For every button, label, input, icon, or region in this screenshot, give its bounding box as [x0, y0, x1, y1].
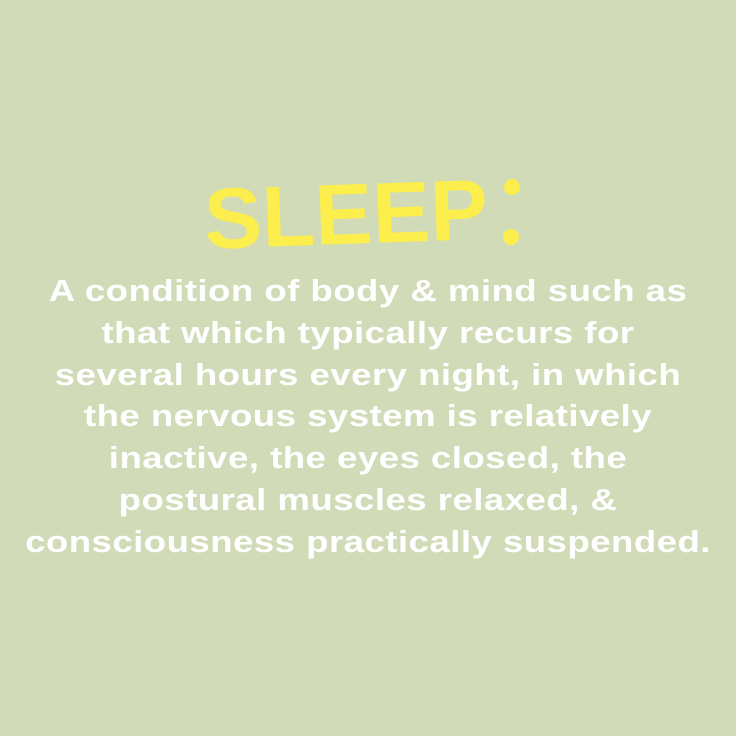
definition text: A condition of body & mind such as: [49, 273, 687, 308]
definition text: the nervous system is relatively: [84, 398, 652, 433]
definition text: several hours every night, in which: [55, 357, 681, 392]
definition text: that which typically recurs for: [102, 315, 634, 350]
definition text: [25, 273, 711, 559]
definition text: consciousness practically suspended.: [25, 524, 711, 559]
definition text: postural muscles relaxed, &: [119, 482, 617, 517]
definition text: inactive, the eyes closed, the: [109, 440, 627, 475]
